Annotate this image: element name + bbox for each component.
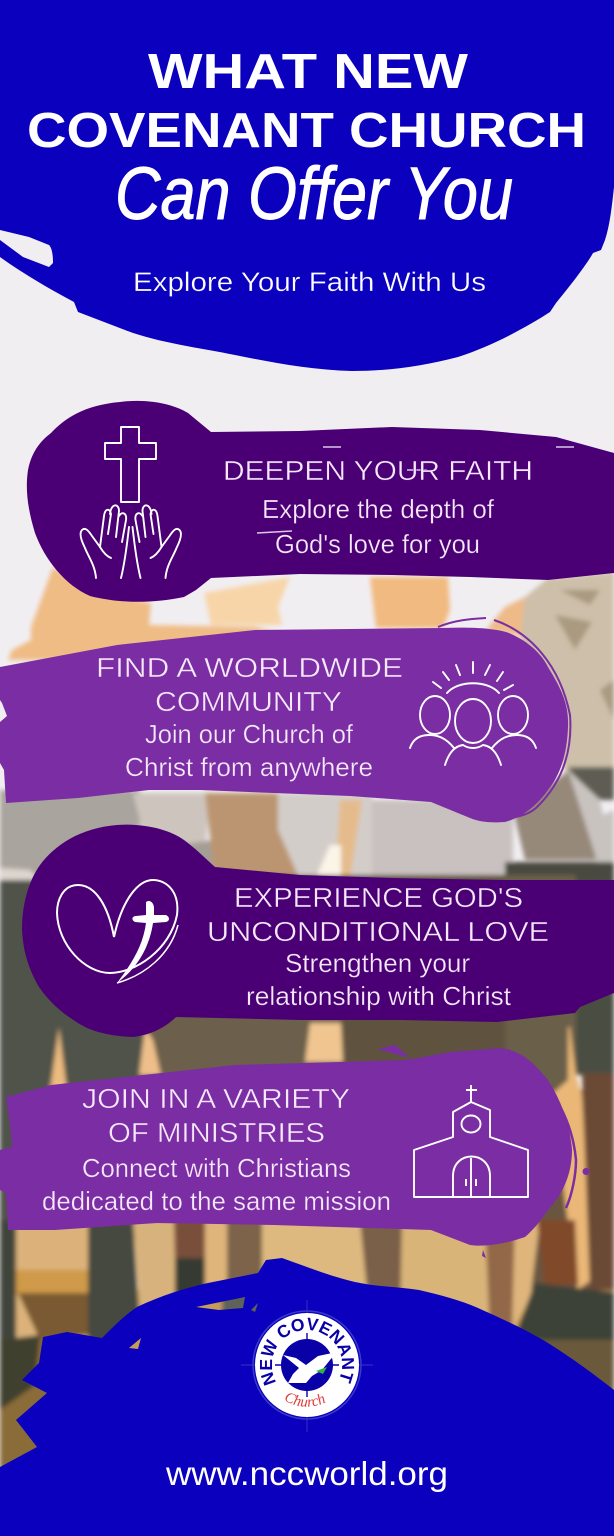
body text: dedicated to the same mission: [42, 1186, 391, 1216]
website url: www.nccworld.org: [165, 1455, 448, 1492]
heading: DEEPEN YOUR FAITH: [223, 455, 533, 486]
title: Can Offer You: [115, 152, 513, 235]
logo: New Covenant Church: [241, 1300, 373, 1432]
brush swooshes: [438, 618, 570, 819]
icon: heart with cross: [57, 880, 178, 983]
heading: [82, 1083, 350, 1148]
panel: worldwide community: [0, 618, 570, 822]
body text: [125, 719, 373, 782]
heading: JOIN IN A VARIETY: [82, 1083, 350, 1114]
heading: UNCONDITIONAL LOVE: [207, 916, 549, 947]
body text: God's love for you: [275, 529, 480, 559]
body text: Strengthen your: [285, 948, 470, 978]
heading: [207, 882, 549, 947]
body text: Explore the depth of: [262, 494, 495, 524]
body text: [246, 948, 512, 1011]
brush specks and swooshes: [378, 1045, 590, 1258]
icon: community of three people: [410, 662, 536, 765]
logo: New Covenant Church: Church: [286, 1393, 326, 1407]
blue footer brush shape: [0, 1258, 614, 1536]
body text: relationship with Christ: [246, 981, 512, 1011]
brush gaps: [257, 447, 574, 533]
blue header brush shape: [0, 0, 614, 371]
heading: EXPERIENCE GOD'S: [234, 882, 523, 913]
heading: OF MINISTRIES: [108, 1117, 325, 1148]
body text: [262, 494, 495, 559]
body text: [42, 1153, 391, 1216]
icon: church building: [414, 1085, 528, 1197]
body text: Join our Church of: [145, 719, 354, 749]
panel: unconditional love: [22, 825, 614, 1037]
panel: variety of ministries: [0, 1045, 590, 1258]
heading: COMMUNITY: [155, 686, 342, 717]
logo: New Covenant Church: NEW COVENANT: [260, 1318, 354, 1386]
subtitle: Explore Your Faith With Us: [133, 267, 486, 297]
body text: Christ from anywhere: [125, 752, 373, 782]
body text: Connect with Christians: [82, 1153, 351, 1183]
heading: [96, 652, 403, 717]
heading: FIND A WORLDWIDE: [96, 652, 403, 683]
title: COVENANT CHURCH: [27, 104, 586, 158]
panel: deepen your faith: [27, 401, 614, 602]
icon: cross and praying hands: [81, 427, 181, 578]
title: WHAT NEW: [148, 45, 469, 99]
title: [27, 45, 586, 235]
